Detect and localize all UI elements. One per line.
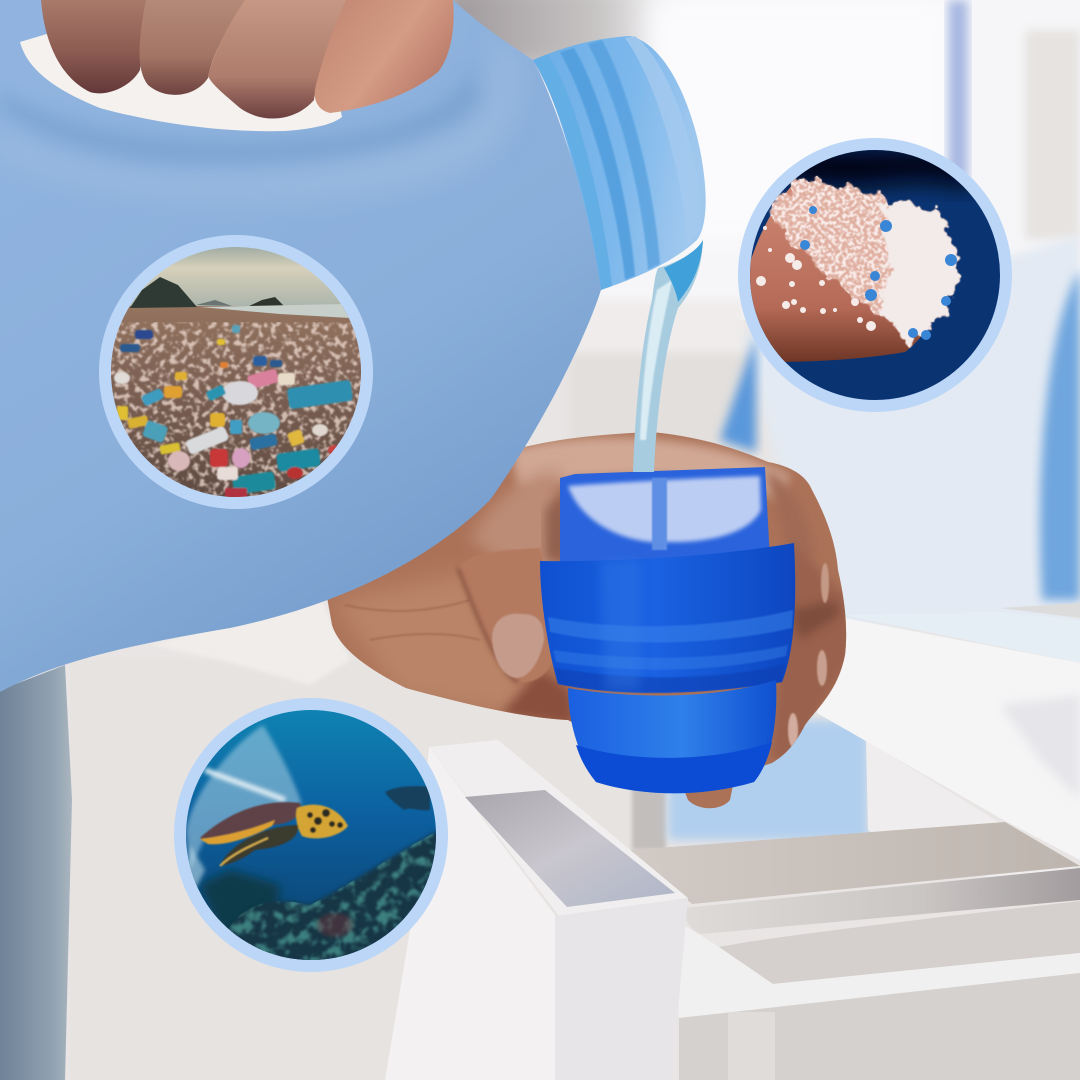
finger 3 [208, 0, 347, 118]
bottle neck [533, 36, 706, 290]
finger 4 knuckle [315, 0, 454, 113]
thumbnail [492, 614, 544, 678]
jeans [0, 665, 72, 1080]
finger 2 [140, 0, 246, 95]
inset circle: microplastics on fingertip [738, 138, 1012, 412]
thumb [458, 548, 556, 682]
lower hand holding cup [327, 432, 850, 808]
grain pile pink base [770, 178, 960, 343]
cup ribbed band [540, 543, 795, 693]
diver silhouette [385, 786, 430, 810]
stream of detergent [633, 240, 703, 472]
drawer front left side [385, 747, 555, 1080]
coral reef [228, 830, 436, 960]
compartment: middle tray [684, 868, 1080, 934]
plastic bag glimpse under bottle [150, 598, 350, 685]
cup upper section [560, 467, 770, 565]
grain pile speckle [770, 178, 960, 343]
inset circle: turtle with plastic bag underwater [174, 698, 448, 972]
compartment: front tray [719, 901, 1080, 984]
drawer rim [670, 917, 1080, 1018]
drawer lower wall [679, 973, 1080, 1080]
blue microplastic grains [800, 206, 957, 340]
white dispenser lid at right [817, 603, 1080, 900]
dense white microplastic pile [880, 203, 960, 343]
compartment: back tray [630, 822, 1080, 904]
turtle [200, 802, 348, 866]
plastic bag [186, 725, 302, 890]
finger 1 [41, 0, 147, 93]
loose grains [756, 226, 876, 331]
inset circle: plastic-covered beach [99, 235, 380, 509]
drawer front face [555, 898, 688, 1080]
measuring cup [540, 467, 795, 793]
upper hand gripping handle [41, 0, 454, 118]
detergent dispenser drawer [385, 740, 1080, 1080]
drawer top face [429, 740, 688, 916]
cup lower section [568, 680, 776, 793]
fingertip [750, 180, 921, 362]
plastic debris [114, 325, 353, 498]
kelp shadow [200, 870, 280, 940]
bottle handle opening [20, 30, 342, 131]
bottle body [0, 0, 601, 692]
